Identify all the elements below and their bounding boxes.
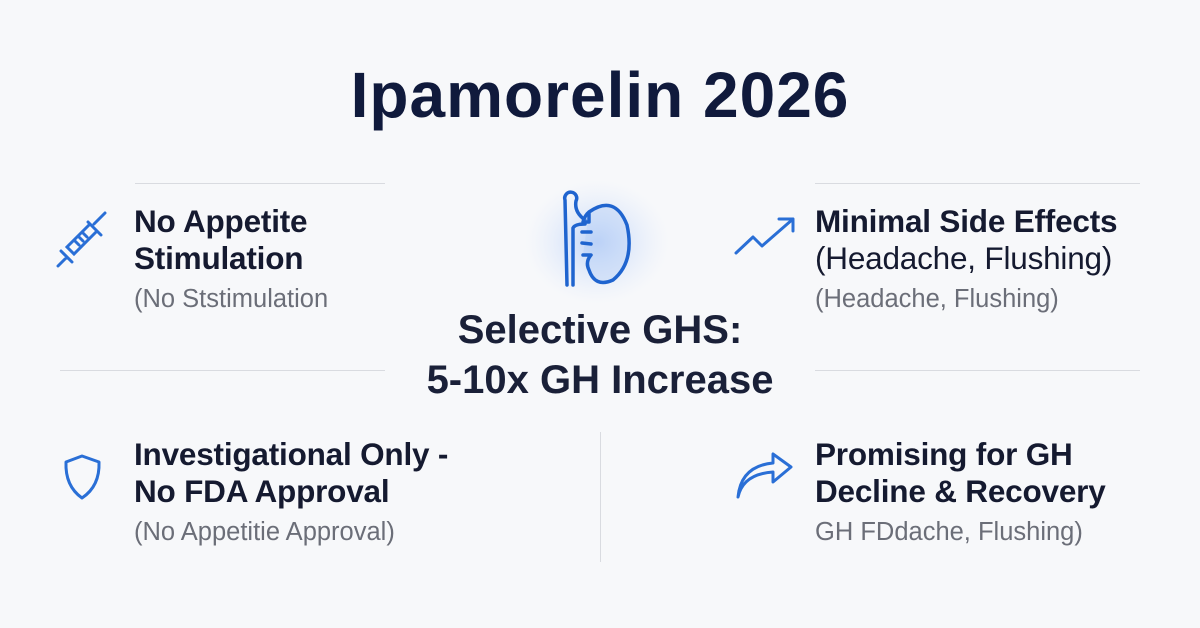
block: appetite: (No Ststimulation (134, 285, 328, 313)
block: side effects: Minimal Side Effects (815, 203, 1117, 239)
block: investigational: (No Appetitie Approval) (134, 518, 395, 546)
block: side effects: (Headache, Flushing) (815, 285, 1059, 313)
block: promising: Decline & Recovery (815, 473, 1106, 509)
block: promising: GH FDdache, Flushing) (815, 518, 1083, 546)
block: promising (815, 436, 1106, 546)
title: Ipamorelin 2026 (351, 59, 849, 131)
block: investigational: No FDA Approval (134, 473, 389, 509)
icon: trend (734, 217, 795, 255)
block: investigational: Investigational Only - (134, 436, 448, 472)
block: appetite (134, 203, 328, 313)
center text (427, 308, 773, 402)
icon: shield (64, 454, 100, 500)
icon: curved arrow (736, 452, 793, 498)
center text: Selective GHS: (458, 308, 742, 352)
block: promising: Promising for GH (815, 436, 1073, 472)
block: appetite: Stimulation (134, 240, 303, 276)
icon: syringe (56, 211, 107, 268)
block: side effects: (Headache, Flushing) (815, 240, 1112, 276)
icon: kidney (544, 190, 650, 288)
block: appetite: No Appetite (134, 203, 307, 239)
center text: 5-10x GH Increase (427, 358, 773, 402)
block: side effects (815, 203, 1117, 313)
block: investigational (134, 436, 448, 546)
